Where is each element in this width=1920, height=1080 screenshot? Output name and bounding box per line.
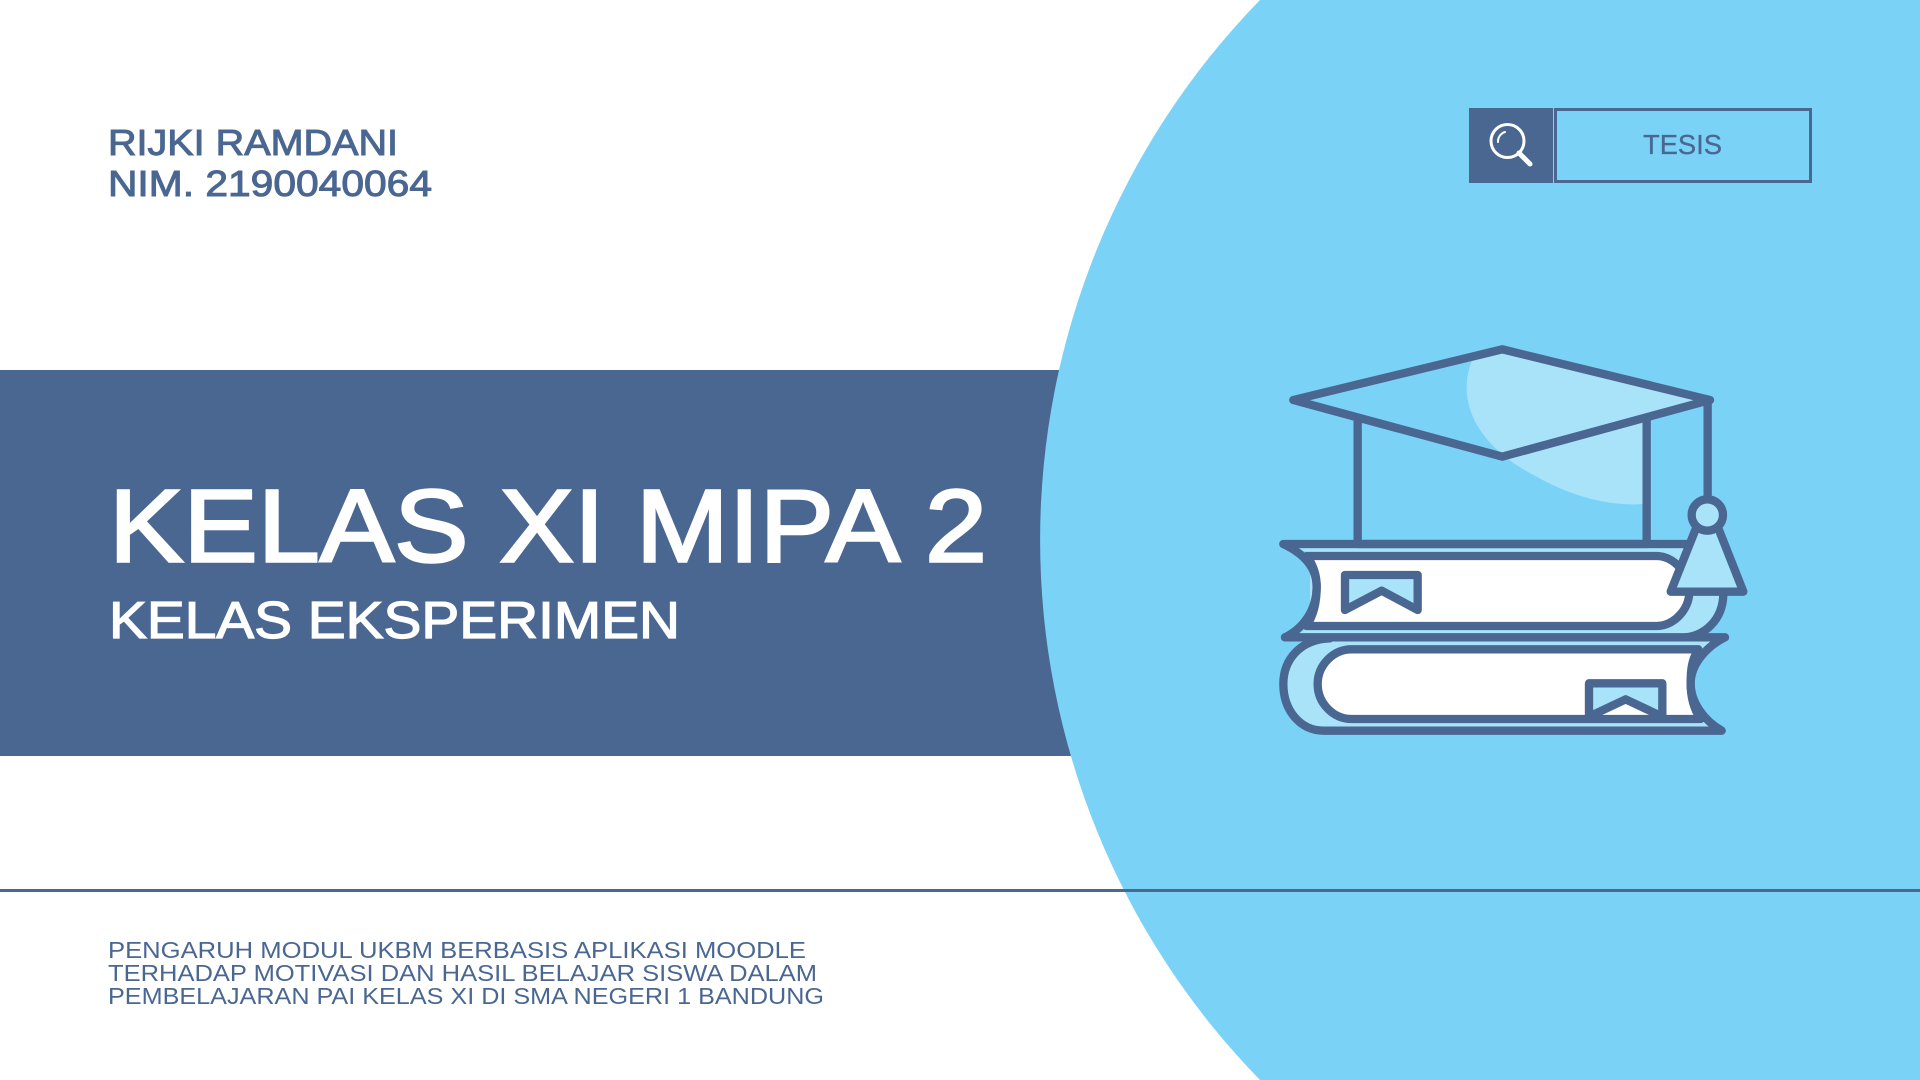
title band (0, 370, 1100, 756)
thesis title text: PEMBELAJARAN PAI KELAS XI DI SMA NEGERI 1 BANDUNG (108, 983, 824, 1009)
icon: magnifier (1491, 124, 1530, 164)
thesis title text: PENGARUH MODUL UKBM BERBASIS APLIKASI MOODLE (108, 937, 806, 963)
cap top (1293, 349, 1710, 457)
horizontal divider (0, 889, 1920, 892)
author name and student number: NIM. 2190040064 (108, 163, 432, 204)
thesis title text (108, 937, 824, 1009)
blue circle background (1040, 0, 1920, 1080)
top book (1283, 544, 1723, 637)
main title: KELAS XI MIPA 2 (109, 468, 987, 584)
bookmark (1345, 575, 1418, 610)
cap sides (1358, 420, 1647, 544)
bookmark (1589, 683, 1662, 717)
subtitle: KELAS EKSPERIMEN (109, 592, 680, 650)
bottom book (1283, 637, 1725, 731)
author name and student number (108, 122, 432, 204)
author name and student number: RIJKI RAMDANI (108, 122, 398, 163)
tag label: TESIS (1643, 129, 1722, 160)
thesis title text: TERHADAP MOTIVASI DAN HASIL BELAJAR SISWA DALAM (108, 960, 817, 986)
cap highlight (1467, 349, 1710, 504)
tassel (1671, 400, 1743, 592)
thesis tag (1469, 108, 1810, 183)
illustration: graduation cap on books (1283, 349, 1743, 731)
